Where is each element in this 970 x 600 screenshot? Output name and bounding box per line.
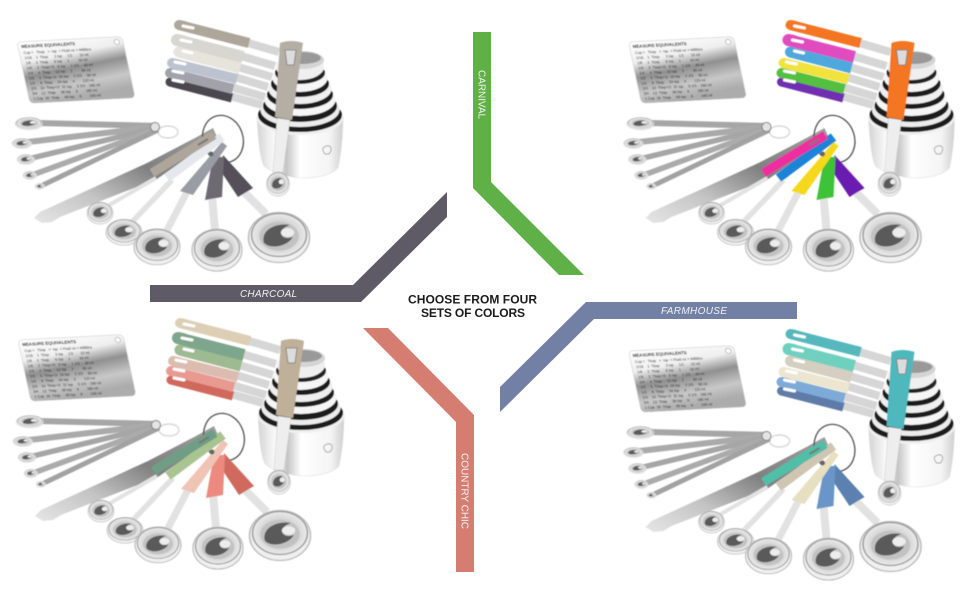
title: choose from four sets of colors bbox=[408, 292, 537, 320]
measure equivalents card: MEASURE EQUIVALENTS bbox=[22, 339, 77, 347]
measure equivalents card: 1/2 8 Tbsp 24 tsp 4 120 ml bbox=[31, 376, 95, 384]
measure equivalents card: 1/16 1 Tbsp 3 tsp 1/2 15 ml bbox=[25, 351, 90, 358]
measure equivalents card: 1 Cup 16 Tbsp 48 tsp 8 240 ml bbox=[644, 93, 713, 101]
measure equivalents card bbox=[628, 346, 747, 412]
measure equivalents card: 1/8 2 Tbsp 6 tsp 1 30 ml bbox=[637, 367, 700, 374]
metal utensils: cups and spoons bbox=[624, 43, 954, 271]
arrow: country chic bbox=[363, 328, 474, 572]
measure equivalents card: 1/6 2 Tbsp+2t 8 tsp 1 1/3 40 ml bbox=[26, 63, 93, 70]
measure equivalents card: Cup = Tbsp = tsp = Fluid oz = Millilitre bbox=[24, 346, 93, 353]
title: choose from four sets of colors: CHOOSE FROM FOUR bbox=[408, 292, 537, 306]
metal utensils: cups and spoons bbox=[624, 352, 954, 580]
measure equivalents card: 1/6 2 Tbsp+2t 8 tsp 1 1/3 40 ml bbox=[27, 361, 94, 368]
title: choose from four sets of colors: SETS OF COLORS bbox=[421, 306, 525, 320]
panel: farmhouse measuring set bbox=[624, 334, 954, 580]
measure equivalents card bbox=[628, 36, 747, 103]
measure equivalents card: Cup = Tbsp = tsp = Fluid oz = Millilitre bbox=[635, 357, 703, 364]
coloured handles: farmhouse palette bbox=[764, 334, 914, 509]
measure equivalents card: MEASURE EQUIVALENTS bbox=[632, 41, 687, 49]
measure equivalents card: 3/4 12 Tbsp 36 tsp 6 180 ml bbox=[33, 386, 99, 394]
coloured handles: country chic palette bbox=[153, 323, 304, 498]
measure equivalents card: 3/4 12 Tbsp 36 tsp 6 180 ml bbox=[643, 88, 709, 96]
measure equivalents card: 1/2 8 Tbsp 24 tsp 4 120 ml bbox=[30, 78, 94, 86]
arrow: country chic: COUNTRY CHIC bbox=[458, 453, 470, 529]
measure equivalents card: 3/4 12 Tbsp 36 tsp 6 180 ml bbox=[32, 88, 98, 96]
arrow: charcoal: CHARCOAL bbox=[240, 289, 297, 300]
measure equivalents card: 1 Cup 16 Tbsp 48 tsp 8 240 ml bbox=[644, 402, 713, 410]
measure equivalents card: 1/2 8 Tbsp 24 tsp 4 120 ml bbox=[641, 387, 706, 395]
panel: carnival measuring set bbox=[624, 25, 954, 271]
measure equivalents card: 1/3 5 Tbsp+1t 16 tsp 2 2/3 80 ml bbox=[640, 382, 708, 389]
measure equivalents card: MEASURE EQUIVALENTS bbox=[632, 350, 687, 358]
arrow: carnival bbox=[473, 32, 584, 275]
arrow: farmhouse: FARMHOUSE bbox=[661, 306, 727, 317]
measure equivalents card bbox=[18, 334, 136, 401]
coloured handles: charcoal palette bbox=[152, 25, 303, 200]
measure equivalents card: 1/3 5 Tbsp+1t 16 tsp 2 2/3 80 ml bbox=[29, 73, 97, 80]
measure equivalents card: 1/4 4 Tbsp 12 tsp 2 60 ml bbox=[639, 377, 703, 384]
arrow: farmhouse bbox=[500, 302, 797, 412]
panel: charcoal measuring set bbox=[12, 25, 343, 271]
metal utensils: cups and spoons bbox=[12, 43, 343, 271]
measure equivalents card: 1/6 2 Tbsp+2t 8 tsp 1 1/3 40 ml bbox=[638, 372, 705, 379]
measure equivalents card: 1/16 1 Tbsp 3 tsp 1/2 15 ml bbox=[24, 53, 89, 60]
arrow: carnival: CARNIVAL bbox=[476, 70, 486, 119]
measure equivalents card: 1/4 4 Tbsp 12 tsp 2 60 ml bbox=[28, 68, 91, 75]
measure equivalents card: 1/6 2 Tbsp+2t 8 tsp 1 1/3 40 ml bbox=[638, 63, 705, 70]
measure equivalents card: 2/3 10 Tbsp+2t 32 tsp 5 1/3 160 ml bbox=[32, 381, 102, 389]
measure equivalents card: 1/8 2 Tbsp 6 tsp 1 30 ml bbox=[26, 356, 89, 363]
arrow: charcoal bbox=[150, 192, 447, 302]
measure equivalents card: 3/4 12 Tbsp 36 tsp 6 180 ml bbox=[643, 397, 709, 405]
measure equivalents card: 1/2 8 Tbsp 24 tsp 4 120 ml bbox=[641, 78, 706, 86]
measure equivalents card: 1/16 1 Tbsp 3 tsp 1/2 15 ml bbox=[636, 362, 700, 369]
measure equivalents card: 1/8 2 Tbsp 6 tsp 1 30 ml bbox=[637, 58, 700, 65]
measure equivalents card: 1/4 4 Tbsp 12 tsp 2 60 ml bbox=[639, 68, 703, 75]
measure equivalents card: Cup = Tbsp = tsp = Fluid oz = Millilitre bbox=[635, 48, 703, 55]
measure equivalents card: 1/3 5 Tbsp+1t 16 tsp 2 2/3 80 ml bbox=[30, 371, 98, 378]
measure equivalents card bbox=[17, 36, 135, 103]
measure equivalents card: 1/16 1 Tbsp 3 tsp 1/2 15 ml bbox=[636, 53, 700, 60]
measure equivalents card: 1/3 5 Tbsp+1t 16 tsp 2 2/3 80 ml bbox=[640, 73, 708, 80]
measure equivalents card: 2/3 10 Tbsp+2t 32 tsp 5 1/3 160 ml bbox=[642, 392, 712, 400]
measure equivalents card: 1 Cup 16 Tbsp 48 tsp 8 240 ml bbox=[34, 391, 102, 399]
measure equivalents card: 2/3 10 Tbsp+2t 32 tsp 5 1/3 160 ml bbox=[31, 83, 101, 91]
measure equivalents card: 1/4 4 Tbsp 12 tsp 2 60 ml bbox=[29, 366, 92, 373]
measure equivalents card: 1 Cup 16 Tbsp 48 tsp 8 240 ml bbox=[33, 93, 101, 101]
panel: country chic measuring set bbox=[13, 323, 344, 569]
measure equivalents card: 2/3 10 Tbsp+2t 32 tsp 5 1/3 160 ml bbox=[642, 83, 712, 91]
coloured handles: carnival palette bbox=[764, 25, 914, 200]
measure equivalents card: MEASURE EQUIVALENTS bbox=[21, 41, 76, 49]
measure equivalents card: 1/8 2 Tbsp 6 tsp 1 30 ml bbox=[25, 58, 88, 65]
metal utensils: cups and spoons bbox=[13, 341, 344, 569]
measure equivalents card: Cup = Tbsp = tsp = Fluid oz = Millilitre bbox=[23, 48, 92, 55]
